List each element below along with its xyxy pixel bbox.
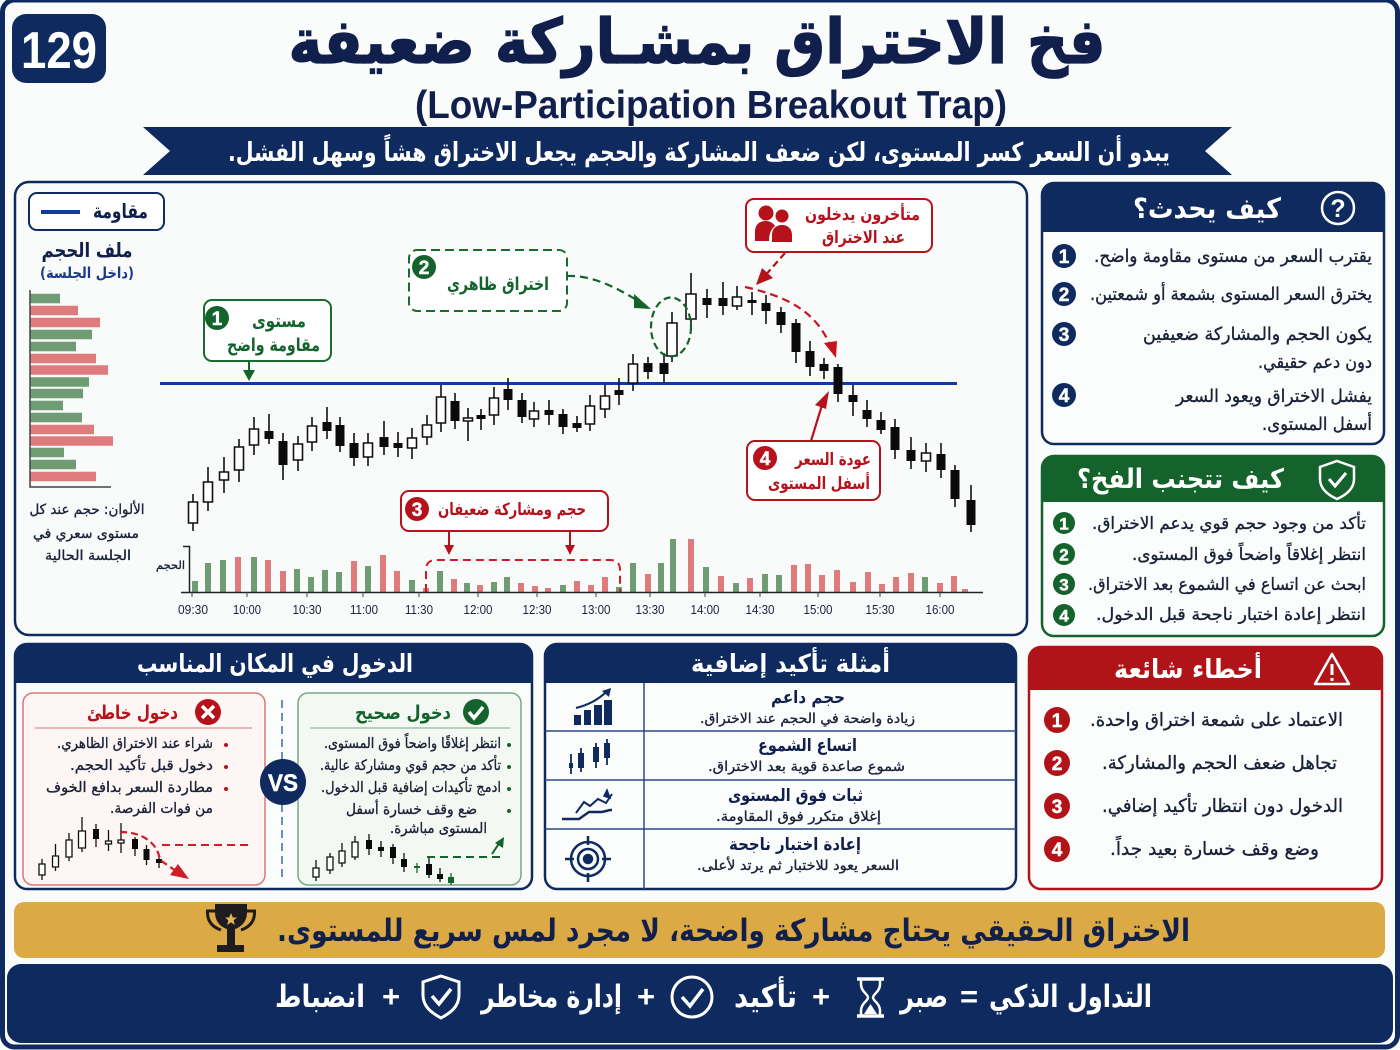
row: wider candles: شموع صاعدة قوية بعد الاختراق. (708, 759, 905, 775)
panel: how to avoid the trap (1042, 456, 1384, 636)
row: holding above level (562, 786, 881, 825)
row: supporting volume: حجم داعم (771, 688, 845, 708)
list: wrong entry bullets: من فوات الفرصة. (110, 801, 213, 817)
callout 4: price back below level: 4 (760, 449, 771, 470)
chart: time axis labels: 12:30 (522, 602, 552, 617)
panel: entering in the right place: الدخول في المكان المناسب (137, 649, 413, 679)
list: mistakes: وضع وقف خسارة بعيد جداً. (1110, 835, 1319, 860)
list: correct entry bullets: تأكد من حجم قوي ومشاركة عالية. (320, 755, 501, 774)
callout 1: clear resistance level: مقاومة واضح (227, 335, 320, 356)
panel: additional confirmation examples (545, 644, 1016, 889)
list: how steps: يفشل الاختراق ويعود السعر (1175, 386, 1372, 407)
chart: time axis labels: 12:00 (464, 602, 492, 617)
callout 1: clear resistance level: 1 (212, 309, 223, 330)
row: holding above level: ثبات فوق المستوى (728, 786, 863, 806)
chart: time axis labels: 10:00 (233, 602, 261, 617)
list: correct entry bullets: المستوى مباشرة. (390, 821, 487, 837)
list: mistakes: 3 (1052, 797, 1062, 818)
divider and VS badge: VS (268, 770, 298, 797)
banner: key takeaway (14, 902, 1385, 958)
highlight: breakout candle ellipse (651, 298, 691, 356)
arrow: late entrants to top (756, 253, 785, 285)
banner: smart trading formula: صبر (898, 979, 948, 1015)
icon: candles (569, 739, 610, 774)
list: avoid steps: انتظر إغلاقاً واضحاً فوق المستوى. (1132, 541, 1366, 565)
chart: time axis labels: 11:00 (350, 602, 378, 617)
banner: smart trading formula: + (812, 979, 830, 1014)
list: avoid steps: 3 (1059, 576, 1069, 594)
list: how steps: يخترق السعر المستوى بشمعة أو شمعتين. (1090, 282, 1372, 305)
banner: smart trading formula: إدارة مخاطر (479, 979, 622, 1015)
list: how steps: 4 (1059, 386, 1070, 407)
chart: candlesticks (188, 273, 976, 532)
icon: trophy (207, 904, 255, 952)
list: how steps: يكون الحجم والمشاركة ضعيفين (1143, 324, 1372, 345)
panel: how does it happen: كيف يحدث؟ (1133, 192, 1282, 225)
callout 1: clear resistance level: مستوى (252, 311, 306, 332)
list: how steps (1052, 244, 1372, 435)
icon: hourglass (857, 979, 884, 1016)
mini chart: correct entry (313, 834, 504, 885)
note: colours legend: مستوى سعري في (33, 526, 139, 542)
list: mistakes: تجاهل ضعف الحجم والمشاركة. (1102, 753, 1337, 774)
chart: time axis labels: 13:00 (582, 602, 610, 617)
banner: summary ribbon (143, 127, 1232, 175)
list: how steps: دون دعم حقيقي. (1258, 352, 1372, 373)
highlight: low volume dashed box (426, 560, 620, 592)
list: correct entry bullets (320, 733, 509, 837)
list: wrong entry bullets: شراء عند الاختراق الظاهري. (57, 736, 213, 752)
chart: time axis labels: 13:30 (636, 602, 664, 617)
card: wrong entry (23, 693, 265, 885)
icon: question mark: ? (1330, 195, 1346, 223)
icon: question mark (1322, 192, 1354, 224)
row: successful retest (565, 835, 899, 882)
chart: volume bars (195, 539, 965, 592)
badge: number 129: 129 (21, 22, 97, 80)
list: how steps: يقترب السعر من مستوى مقاومة واضح. (1094, 246, 1372, 267)
panel: how to avoid the trap: كيف تتجنب الفخ؟ (1077, 464, 1284, 495)
list: avoid steps: 4 (1059, 606, 1069, 626)
icon: rising bars (574, 688, 612, 725)
icon: people (755, 206, 792, 242)
callout 3: weak volume and participation (401, 491, 608, 555)
legend: resistance: مقاومة (93, 199, 148, 223)
chart: time axis labels: 15:00 (804, 602, 832, 617)
chart: time axis labels: 14:00 (690, 602, 720, 617)
row: successful retest: السعر يعود للاختبار ثم يرتد لأعلى. (697, 856, 899, 874)
list: correct entry bullets: انتظر إغلاقًا واضحاً فوق المستوى. (324, 733, 501, 752)
banner: smart trading formula: + (382, 979, 400, 1014)
list: how steps: 3 (1059, 325, 1069, 346)
chart: time axis labels: 16:00 (926, 602, 954, 617)
callout 4: price back below level: عودة السعر (794, 450, 871, 470)
callout: late entrants: متأخرون يدخلون (805, 203, 920, 225)
volume axis (156, 546, 983, 597)
row: wider candles (569, 736, 905, 775)
heading: volume profile (40, 238, 134, 282)
list: avoid steps (1053, 511, 1366, 626)
icon: shield check (1320, 461, 1354, 499)
callout 2: false breakout (409, 250, 567, 311)
callout: late entrants: عند الاختراق (822, 228, 905, 248)
heading: volume profile: ملف الحجم (42, 238, 132, 262)
list: correct entry bullets: ادمج تأكيدات إضافية قبل الدخول. (321, 777, 501, 796)
list: how steps: 1 (1059, 247, 1070, 268)
banner: smart trading formula: انضباط (275, 979, 365, 1015)
panel: common mistakes: أخطاء شائعة (1114, 652, 1262, 685)
list: avoid steps: انتظر إعادة اختبار ناجحة قبل الدخول. (1096, 605, 1366, 625)
note: colours legend: الجلسة الحالية (45, 548, 131, 564)
list: mistakes: الدخول دون انتظار تأكيد إضافي. (1102, 793, 1343, 817)
title: فخ الاختراق بمشـاركة ضعيفة (288, 5, 1106, 78)
list: correct entry bullets: ضع وقف خسارة أسفل (346, 799, 477, 818)
banner: key takeaway: الاختراق الحقيقي يحتاج مشاركة واضحة، لا مجرد لمس سريع للمستوى. (277, 913, 1190, 949)
callout 3: weak volume and participation: 3 (412, 500, 422, 521)
callout 4: price back below level: أسفل المستوى (768, 472, 870, 494)
icon: shield check (423, 976, 459, 1018)
chart: time axis labels: 11:30 (405, 602, 433, 617)
icon: target (565, 836, 611, 882)
list: avoid steps: 1 (1059, 514, 1069, 534)
list: mistakes: 2 (1052, 754, 1062, 775)
note: colours legend: الألوان: حجم عند كل (30, 500, 144, 518)
arrow: to breakout candle (567, 276, 651, 309)
callout 4: price back below level (747, 391, 880, 500)
volume axis: الحجم (156, 558, 185, 572)
row: holding above level: إغلاق متكرر فوق المقاومة. (716, 809, 881, 825)
callout 3: weak volume and participation: حجم ومشاركة ضعيفان (438, 500, 586, 520)
chart: volume profile bars (30, 290, 113, 487)
banner: smart trading formula: تأكيد (734, 976, 797, 1015)
chart: time axis labels: 14:30 (746, 602, 774, 617)
icon: warning triangle (1315, 654, 1349, 684)
card: correct entry (298, 693, 521, 885)
chart: time axis labels: 15:30 (866, 602, 894, 617)
resistance line (160, 382, 957, 385)
chart: time axis labels (178, 602, 954, 617)
icon: trend above level (562, 790, 612, 819)
banner: smart trading formula (7, 964, 1393, 1043)
card: wrong entry: دخول خاطئ (87, 702, 178, 724)
callout: late entrants (746, 199, 932, 252)
list: mistakes: 1 (1052, 711, 1063, 732)
list: wrong entry bullets (46, 736, 226, 817)
panel: main chart (15, 182, 1027, 635)
legend: resistance (29, 193, 164, 230)
row: supporting volume (574, 688, 915, 727)
card: correct entry: دخول صحيح (355, 702, 451, 724)
row: successful retest: إعادة اختبار ناجحة (729, 835, 861, 855)
panel: common mistakes (1029, 647, 1382, 889)
list: avoid steps: 2 (1059, 546, 1069, 564)
list: wrong entry bullets: دخول قبل تأكيد الحجم. (70, 755, 213, 774)
banner: smart trading formula: التداول الذكي (989, 979, 1152, 1015)
list: wrong entry bullets: مطاردة السعر بدافع الخوف (46, 780, 213, 796)
panel: additional confirmation examples: أمثلة تأكيد إضافية (691, 647, 890, 678)
list: mistakes (1044, 707, 1343, 862)
list: avoid steps: ابحث عن اتساع في الشموع بعد الاختراق. (1088, 575, 1366, 595)
row: wider candles: اتساع الشموع (758, 736, 857, 756)
callout 1: clear resistance level (204, 300, 331, 381)
banner: summary ribbon: يبدو أن السعر كسر المستوى، لكن ضعف المشاركة والحجم يجعل الاختراق هشاً وسهل الفشل. (228, 133, 1170, 168)
subtitle: (Low-Participation Breakout Trap) (415, 84, 1007, 127)
callout 2: false breakout: اختراق ظاهري (447, 274, 549, 295)
note: colours legend (30, 500, 144, 564)
panel: how does it happen (1042, 183, 1384, 444)
banner: smart trading formula: + (637, 979, 655, 1014)
list: avoid steps: تأكد من وجود حجم قوي يدعم الاختراق. (1092, 511, 1366, 534)
list: how steps: 2 (1059, 285, 1069, 306)
panel: entering in the right place (15, 644, 532, 889)
list: how steps: أسفل المستوى. (1262, 412, 1372, 435)
icon: check circle (672, 977, 712, 1017)
chart: time axis labels: 09:30 (178, 602, 208, 617)
divider and VS badge (260, 700, 306, 882)
arrow: dashed fall to level (745, 287, 837, 358)
callout 2: false breakout: 2 (419, 258, 429, 279)
banner: smart trading formula: = (960, 979, 978, 1014)
mini chart: wrong entry (39, 817, 249, 880)
row: supporting volume: زيادة واضحة في الحجم عند الاختراق. (700, 711, 915, 727)
heading: volume profile: (داخل الجلسة) (40, 264, 134, 282)
chart: time axis labels: 10:30 (292, 602, 322, 617)
list: mistakes: الاعتماد على شمعة اختراق واحدة. (1090, 710, 1343, 731)
list: mistakes: 4 (1052, 840, 1063, 861)
